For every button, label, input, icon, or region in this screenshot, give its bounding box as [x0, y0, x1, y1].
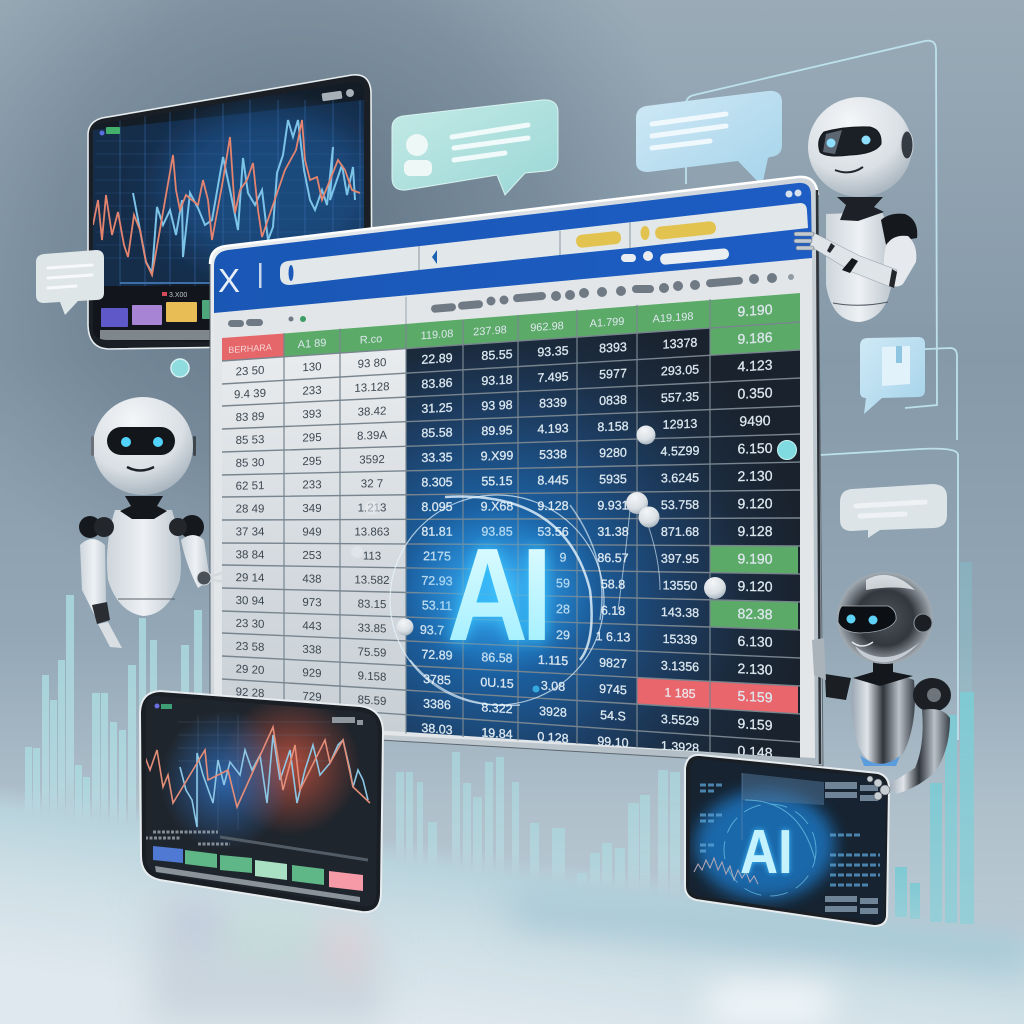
row [236, 642, 772, 675]
row: 93.7 [420, 623, 444, 638]
header row figures: A1.799 [590, 316, 624, 330]
toolbar dots [228, 273, 794, 327]
row: 86.58 [481, 650, 513, 666]
row: 9280 [599, 446, 627, 460]
header cells [222, 293, 800, 714]
robot face visor [819, 127, 881, 156]
row: 54.S [600, 708, 626, 724]
tablet buttons: 3.X00 [169, 292, 187, 299]
robot neck [120, 496, 167, 519]
tablet buttons [101, 292, 212, 327]
window pill [332, 717, 363, 725]
row: 3.5529 [661, 712, 699, 728]
tablet: bottom right AI [685, 755, 889, 926]
window frame [210, 177, 823, 766]
status pill [100, 127, 120, 136]
row: 0838 [599, 393, 627, 408]
row: 62 51 [236, 480, 264, 493]
row: 4.193 [537, 421, 569, 436]
row: 349 [302, 503, 322, 515]
table figures [228, 301, 773, 761]
row: 53.56 [537, 525, 569, 539]
row: 9.158 [358, 670, 386, 684]
AI hologram [390, 495, 660, 705]
row: 0U.15 [480, 675, 514, 691]
row: 8.305 [421, 475, 453, 489]
window control dots [786, 190, 802, 198]
screen small figures [700, 785, 880, 885]
row: 22.89 [421, 351, 453, 367]
robot shoulders [79, 516, 101, 538]
row: 3592 [359, 454, 385, 467]
row [236, 415, 770, 444]
screen glow [695, 790, 835, 900]
row: 85 30 [236, 457, 264, 470]
row [236, 526, 772, 536]
search pill [621, 248, 729, 265]
row: 338 [302, 644, 322, 657]
row [236, 664, 772, 702]
speech bubble: light blue [636, 91, 782, 186]
robot head [808, 97, 912, 197]
status pill [154, 704, 172, 709]
row: 5.159 [737, 688, 773, 705]
row: 28 [556, 602, 570, 616]
row: 23 58 [236, 641, 264, 654]
robot face visor [838, 606, 896, 633]
row [236, 470, 772, 490]
AI label: AI [740, 818, 793, 887]
row: 89.95 [481, 423, 513, 438]
row: 85 53 [236, 434, 264, 447]
row: 8.39A [357, 430, 387, 443]
robot body [826, 212, 893, 322]
row: 8339 [539, 395, 567, 411]
chart glow [93, 100, 364, 290]
row: 8.322 [481, 700, 513, 716]
window pill [322, 89, 354, 101]
header row figures: 119.08 [421, 328, 453, 342]
robot shoulder [913, 678, 951, 712]
row: 438 [302, 573, 322, 586]
row: 58.8 [601, 577, 625, 592]
robot neck [837, 197, 884, 221]
row: 99.10 [597, 734, 629, 750]
row: 3.1356 [661, 658, 699, 674]
row: 9.186 [737, 329, 773, 347]
tablet: top left chart [88, 75, 380, 349]
row: 973 [302, 597, 322, 609]
blue candles [180, 735, 368, 827]
row: 9 [560, 551, 567, 565]
row: 85.58 [421, 425, 453, 440]
light table area [222, 348, 406, 732]
row: 83.86 [421, 376, 453, 391]
row: 29 20 [236, 663, 264, 677]
row [236, 687, 772, 730]
row: 293.05 [661, 362, 699, 378]
arcs [724, 800, 816, 896]
floor reflections [150, 890, 1024, 1024]
header row figures: 9.190 [737, 301, 773, 320]
row [236, 573, 772, 592]
row: 83.15 [358, 598, 386, 611]
bottom strip [155, 866, 360, 902]
row: 130 [302, 361, 322, 374]
row: 5935 [599, 472, 627, 486]
row [236, 596, 772, 620]
row: 3.6245 [661, 471, 699, 485]
background bar chart: right [895, 562, 974, 924]
row: 31.25 [421, 400, 453, 416]
row [236, 550, 772, 564]
row: 557.35 [661, 390, 699, 405]
row: 19.84 [481, 725, 513, 742]
outline panels: top right [686, 41, 958, 740]
robot forearm [810, 233, 897, 288]
row: 13.863 [354, 526, 390, 539]
row: 6.130 [737, 633, 773, 650]
row: 93.18 [481, 372, 513, 388]
red candles [145, 727, 370, 807]
robot hand on tablet [867, 776, 890, 800]
AI label glow: AI [740, 818, 793, 887]
row: 28 49 [236, 503, 264, 516]
row: 393 [302, 408, 322, 421]
tablet: bottom left chart [140, 691, 383, 912]
row: 113 [363, 551, 381, 563]
row: 9.120 [737, 495, 773, 511]
row: 253 [302, 550, 322, 562]
row: 93.35 [537, 344, 569, 360]
robot body [107, 510, 181, 616]
row: 9.159 [737, 715, 773, 733]
row: 75.59 [358, 646, 386, 660]
row: 13550 [663, 578, 697, 593]
row: 83 89 [236, 411, 264, 424]
row: 59 [556, 576, 570, 591]
close icon: X [218, 262, 240, 299]
grid lines [222, 295, 800, 760]
row: 38.03 [421, 721, 453, 737]
row: 233 [302, 385, 322, 398]
robot face visor [107, 427, 175, 455]
row: 85.59 [358, 694, 386, 708]
row: 23 30 [236, 618, 264, 631]
row: 13378 [663, 335, 697, 352]
row [236, 498, 772, 513]
screen panel [742, 773, 824, 805]
row: 9.4 39 [234, 388, 266, 401]
chart blue glow [164, 714, 285, 846]
row: 93.85 [481, 525, 513, 539]
screen data blocks [825, 782, 878, 914]
data spheres [351, 426, 796, 692]
row: 295 [302, 456, 322, 468]
row: 1.3928 [661, 739, 699, 756]
row [236, 332, 772, 376]
row: 92 28 [236, 686, 264, 700]
robot body [851, 673, 915, 764]
row: 2.130 [737, 467, 773, 484]
row [236, 443, 772, 467]
row: 13.128 [354, 381, 390, 395]
row: 4.5Z99 [661, 444, 699, 459]
row: 86.57 [597, 551, 629, 565]
robot upper arm [884, 236, 916, 287]
row: 31.38 [597, 525, 629, 539]
row: 9490 [739, 412, 771, 429]
row: 9.X68 [481, 499, 513, 514]
row: 9.120 [737, 578, 773, 594]
robot: right chrome [812, 572, 951, 794]
body panel [214, 255, 815, 758]
screen caption lines [145, 832, 230, 844]
header row figures: 962.98 [530, 320, 564, 334]
row: 1.213 [358, 502, 386, 515]
row: 929 [302, 667, 322, 680]
row: 55.15 [481, 474, 513, 488]
row: 6.18 [601, 603, 625, 618]
row: 3785 [423, 672, 451, 687]
robot neck [853, 660, 913, 686]
robot hand [794, 232, 814, 250]
row: 2175 [423, 549, 451, 563]
header row figures: R.co [360, 333, 382, 347]
row: 9.128 [737, 523, 773, 539]
main spreadsheet window [210, 177, 823, 766]
row: 72.89 [421, 647, 453, 663]
AI label glow: AI [447, 520, 546, 668]
row: 81.81 [421, 525, 453, 539]
address toolbar [280, 203, 808, 285]
AI label: AI [447, 520, 546, 668]
row: 8393 [599, 340, 627, 356]
robot shoulder [881, 214, 917, 245]
speech bubble: teal [392, 100, 558, 195]
row: 38.42 [358, 405, 386, 419]
row: 23 50 [236, 365, 264, 378]
robot arm left [825, 674, 851, 700]
row: 15339 [663, 632, 697, 647]
speech bubble: white left [36, 250, 104, 315]
row: 30 94 [236, 595, 265, 608]
row: 9.931 [597, 498, 629, 513]
blue candles [133, 120, 355, 273]
row: 6.150 [737, 440, 773, 457]
header row figures: A19.198 [653, 311, 693, 326]
row: 4.123 [737, 356, 773, 374]
speech bubble: document icon [860, 337, 925, 414]
row: 82.38 [737, 605, 773, 622]
speech bubble: white right [840, 484, 947, 538]
row: 3.08 [541, 679, 565, 694]
row: 0.350 [737, 384, 773, 402]
robot: top right white [794, 97, 917, 322]
row: 871.68 [661, 525, 699, 539]
row: 1.115 [538, 653, 568, 668]
header row figures: 237.98 [473, 324, 507, 339]
row: 5977 [599, 366, 627, 382]
hologram rings [390, 495, 660, 705]
bubble marker [171, 359, 189, 377]
screen line chart [694, 858, 758, 884]
red candles [93, 120, 360, 275]
row: 12913 [663, 417, 697, 432]
row: 7.495 [537, 369, 569, 385]
robot head [93, 397, 193, 495]
row: 9.128 [537, 499, 569, 513]
robot left arm [80, 539, 108, 618]
row: 9.190 [737, 550, 773, 567]
row: 295 [302, 432, 322, 445]
header row figures [229, 304, 772, 354]
row [236, 388, 772, 422]
row: 93 80 [358, 357, 386, 371]
row: 9.X99 [481, 449, 513, 463]
row [234, 360, 772, 398]
row: 29 14 [236, 572, 265, 585]
row: 13.582 [354, 574, 390, 587]
robot arm right [888, 709, 950, 794]
row [236, 618, 772, 647]
header row figures: A1 89 [298, 337, 326, 351]
row: 0 128 [537, 730, 569, 746]
row: 38 84 [236, 549, 265, 562]
row: 53.758 [661, 498, 699, 512]
row: 729 [302, 691, 322, 704]
row: 33.85 [358, 622, 386, 635]
row: 37 34 [236, 526, 265, 538]
robot: left white [79, 397, 232, 648]
header row figures: BERHARA [228, 342, 272, 355]
row: 53.11 [422, 598, 452, 613]
row: 143.38 [661, 605, 699, 620]
chart red glow [229, 704, 356, 831]
tablet buttons [153, 846, 363, 891]
row: 3928 [539, 704, 567, 720]
row: 9745 [599, 682, 627, 697]
dark table area [406, 322, 800, 758]
row: 8.158 [597, 419, 629, 434]
row: 949 [302, 526, 322, 538]
row: 5338 [539, 447, 567, 462]
row: 0.148 [738, 742, 773, 761]
row: 3386 [423, 696, 451, 712]
row: 85.55 [481, 347, 513, 363]
row: 93 98 [481, 398, 513, 413]
row [422, 723, 772, 756]
robot head [837, 572, 933, 664]
blue title band [214, 183, 812, 313]
row: 2.130 [737, 660, 773, 678]
row: 33.35 [421, 450, 453, 465]
row: 32 7 [361, 478, 383, 491]
row: 1 185 [664, 685, 696, 701]
row: 72.93 [421, 574, 453, 588]
row: 397.95 [661, 552, 699, 566]
row: 8.445 [537, 473, 569, 487]
button row [93, 286, 210, 342]
background bar chart: centre [396, 752, 680, 897]
yellow buttons [575, 231, 622, 248]
floor [0, 780, 1024, 1024]
background bar chart: left [25, 595, 202, 835]
row: 233 [302, 479, 322, 492]
row: 1 6.13 [596, 629, 630, 645]
row: 8.095 [421, 500, 453, 514]
row: 9827 [599, 656, 627, 671]
row: 29 [556, 628, 570, 642]
row: 443 [302, 620, 322, 633]
robot right arm [181, 535, 210, 588]
